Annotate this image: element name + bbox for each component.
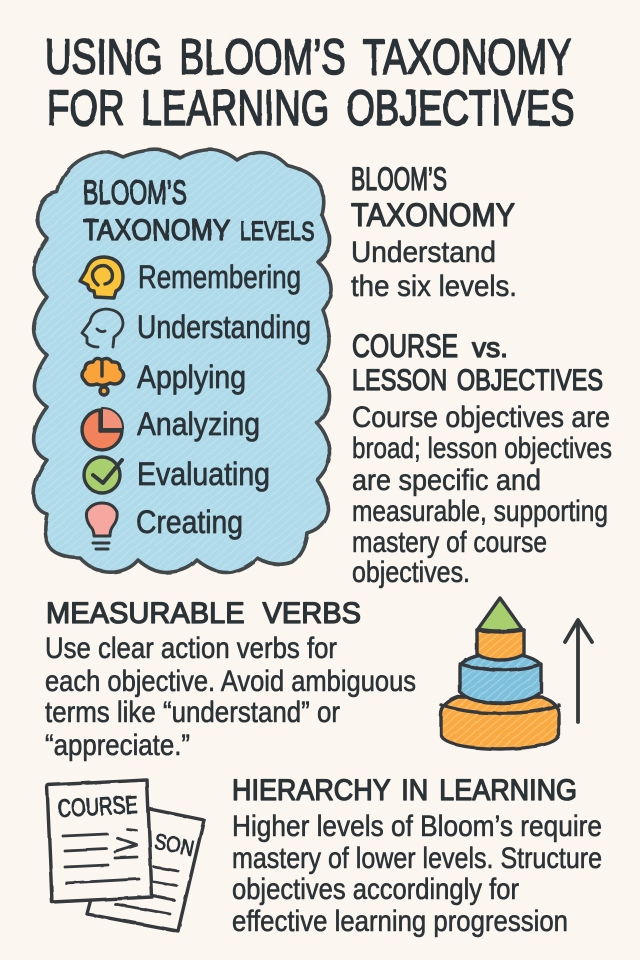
lesson document [87,803,204,931]
text block: Course vs. lesson objectives: mastery of course [352,526,547,559]
level: Creating: Creating [136,504,243,540]
level: Evaluating [84,456,270,493]
middle tier [460,653,541,703]
text block: Bloom's Taxonomy: the six levels. [351,270,517,303]
panel heading: TAXONOMY [83,214,230,247]
level: Applying [82,358,246,395]
text block: Hierarchy in learning: HIERARCHY IN LEARNING [232,774,577,807]
lesson document: SON [152,828,196,861]
cloud shape [34,150,331,572]
arrow: upward progression [565,620,592,722]
course document: COURSE [57,791,138,823]
icon: orange brain [82,358,124,395]
text block: Measurable verbs: Use clear action verbs for [45,632,337,665]
level: Analyzing: Analyzing [137,406,260,442]
level: Understanding: Understanding [137,309,311,345]
text block: Measurable verbs [45,597,416,762]
text block: Bloom's Taxonomy: Understand [351,236,496,269]
title [45,29,575,136]
text block: Hierarchy in learning: effective learning progression [232,905,568,938]
level: Analyzing [82,406,260,450]
text block: Measurable verbs: MEASURABLE VERBS [46,597,361,630]
illustration: stacked tiers [441,598,559,749]
text block: Course vs. lesson objectives: COURSE [352,328,458,364]
level: Applying: Applying [137,359,246,395]
cone [478,598,522,631]
text block: Hierarchy in learning [232,774,602,938]
icon: check circle [84,457,122,493]
level: Understanding [82,309,311,347]
text block: Measurable verbs: “appreciate.” [45,729,190,762]
text block: Course vs. lesson objectives: are specific and [352,464,541,497]
icon: pie chart [82,408,123,450]
panel heading: LEVELS [240,216,314,246]
text block: Course vs. lesson objectives: objectives. [352,556,470,589]
icon: head profile [82,309,123,347]
icon: head with memory loop [80,257,123,298]
level: Remembering [80,257,301,298]
text block: Bloom's Taxonomy: BLOOM’S [351,161,447,197]
text block: Bloom's Taxonomy: TAXONOMY [351,197,515,233]
course document [47,780,152,902]
text block: Bloom's Taxonomy [351,161,517,303]
panel heading: BLOOM’S [83,174,187,212]
level: Creating [86,503,243,549]
text block: Measurable verbs: each objective. Avoid ambiguous [45,665,416,698]
panel: Bloom's taxonomy levels cloud [34,150,331,572]
text block: Course vs. lesson objectives [352,328,612,589]
text block: Measurable verbs: terms like “understand” or [45,696,340,729]
level: Remembering: Remembering [138,259,301,295]
bottom tier [441,697,559,749]
top tier [477,630,524,660]
level: Evaluating: Evaluating [137,456,270,492]
text block: Course vs. lesson objectives: vs. [472,332,508,363]
panel heading [83,174,314,247]
illustration: course and lesson documents [47,780,204,931]
text block: Course vs. lesson objectives: Course objectives are [352,401,610,434]
text block: Hierarchy in learning: objectives accordingly for [232,873,519,906]
icon: light bulb [86,503,117,549]
